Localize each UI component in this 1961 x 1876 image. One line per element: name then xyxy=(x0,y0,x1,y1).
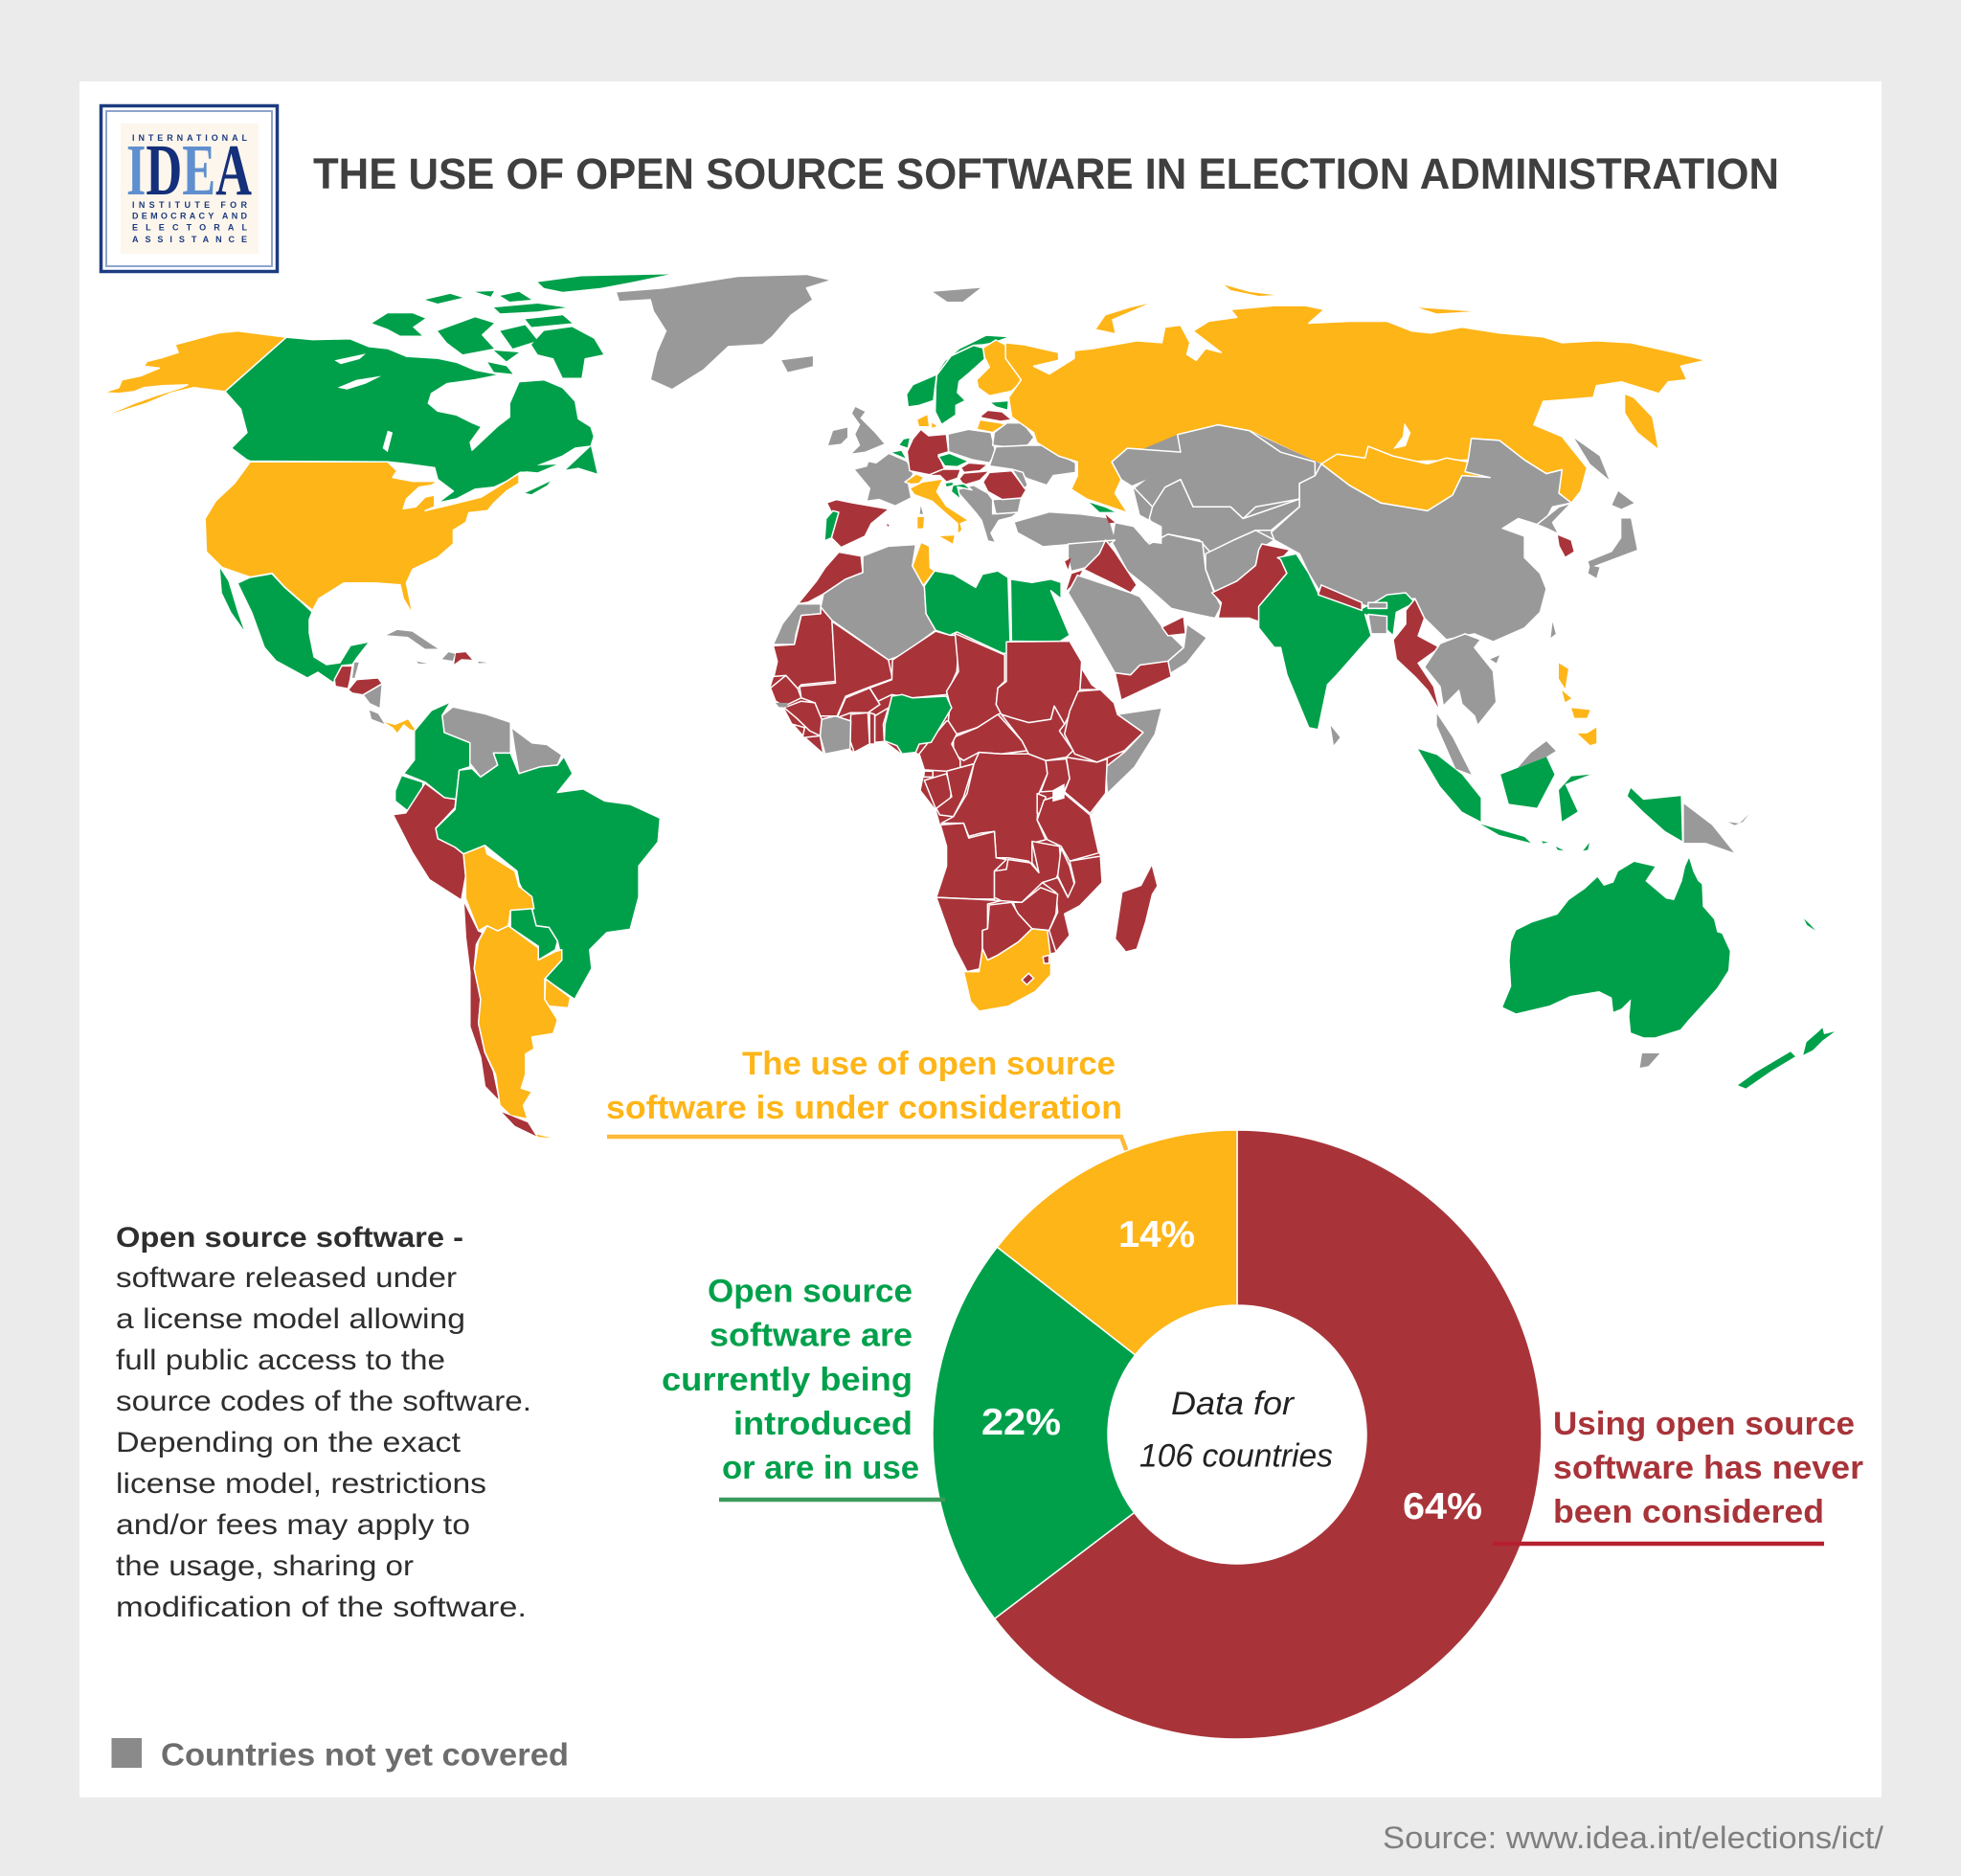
donut centre note xyxy=(1139,1386,1333,1475)
logo: International IDEA: INSTITUTE FOR xyxy=(132,200,247,210)
logo: International IDEA: DEMOCRACY AND xyxy=(132,211,247,220)
legend: countries not yet covered: Countries not yet covered xyxy=(161,1737,569,1772)
percentage: 64%: 64% xyxy=(1403,1486,1482,1527)
logo: International IDEA: ASSISTANCE xyxy=(132,235,247,244)
donut centre note: Data for xyxy=(1171,1386,1296,1422)
definition text block: the usage, sharing or xyxy=(116,1550,414,1582)
label: currently introduced or in use: currently being xyxy=(662,1362,913,1398)
definition text block: license model, restrictions xyxy=(116,1468,486,1500)
world map xyxy=(97,274,1835,1138)
map region: North America and Greenland xyxy=(97,274,980,630)
definition text block: source codes of the software. xyxy=(116,1386,531,1417)
label: currently introduced or in use: Open source xyxy=(708,1274,913,1310)
label: never considered xyxy=(1493,1406,1863,1544)
map region: Africa xyxy=(771,542,1162,1011)
segment: 22 percent xyxy=(933,1247,1136,1618)
logo: International IDEA: IDEA xyxy=(126,130,252,211)
label: never considered: software has never xyxy=(1553,1450,1863,1486)
label: under consideration: software is under consideration xyxy=(606,1090,1122,1126)
map region: Mexico xyxy=(237,574,370,683)
map region: Australia and New Zealand xyxy=(1502,814,1835,1089)
segment: 64 percent xyxy=(995,1130,1542,1739)
percentage: 22%: 22% xyxy=(981,1402,1061,1443)
title: THE USE OF OPEN SOURCE SOFTWARE IN ELECTION ADMINISTRATION xyxy=(313,149,1779,198)
definition text block xyxy=(116,1222,531,1623)
definition text block: Open source software - xyxy=(116,1222,463,1254)
definition text block: software released under xyxy=(116,1262,457,1294)
label: currently introduced or in use: or are in use xyxy=(722,1450,919,1486)
source line: Source: www.idea.int/elections/ict/ xyxy=(1383,1820,1883,1855)
label: currently introduced or in use: introduced xyxy=(733,1406,913,1442)
map region: Central and South America xyxy=(334,630,660,1138)
label: under consideration: The use of open source xyxy=(742,1046,1116,1082)
percentage: 14%: 14% xyxy=(1118,1214,1195,1255)
label: never considered: been considered xyxy=(1553,1494,1824,1530)
definition text block: modification of the software. xyxy=(116,1592,527,1623)
label: under consideration xyxy=(606,1046,1127,1152)
logo: International IDEA xyxy=(101,105,278,272)
label: currently introduced or in use xyxy=(662,1274,945,1500)
definition text block: a license model allowing xyxy=(116,1303,465,1335)
definition text block: and/or fees may apply to xyxy=(116,1509,470,1541)
definition text block: full public access to the xyxy=(116,1345,445,1376)
logo: International IDEA: INTERNATIONAL xyxy=(132,133,247,143)
segment: 14 percent xyxy=(997,1130,1237,1355)
definition text block: Depending on the exact xyxy=(116,1427,462,1458)
map region: Europe xyxy=(824,335,1075,548)
map region: Russia and Asia xyxy=(1005,285,1734,852)
label: currently introduced or in use: software are xyxy=(710,1318,913,1354)
donut centre note: 106 countries xyxy=(1139,1438,1333,1475)
label: never considered: Using open source xyxy=(1553,1406,1855,1442)
logo: International IDEA: ELECTORAL xyxy=(132,222,247,232)
donut chart xyxy=(933,1130,1542,1739)
